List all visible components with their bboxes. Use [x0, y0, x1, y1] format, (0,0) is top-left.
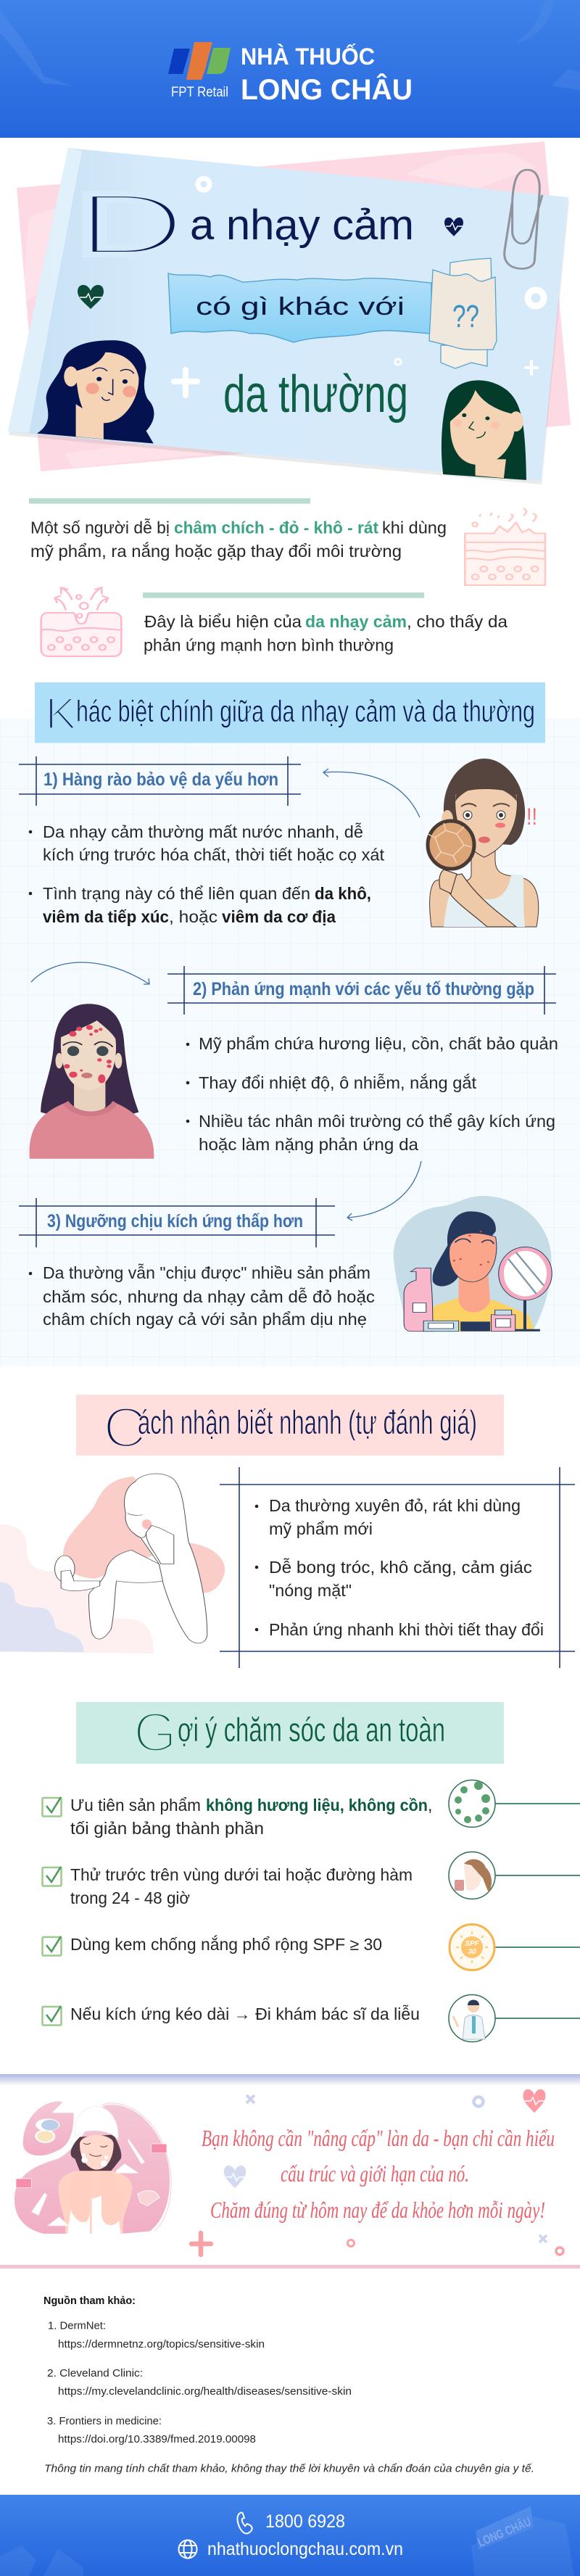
heading: quick self-check: C	[103, 1395, 146, 1459]
bullets 2: Nhiều tác nhân môi trường có thể gây kích ứng	[199, 1112, 555, 1131]
references: https://dermnetnz.org/topics/sensitive-skin	[58, 2338, 265, 2350]
face: girl with navy hair	[37, 340, 154, 444]
frame with bullets: mỹ phẩm mới	[269, 1519, 373, 1538]
title line 1: D	[75, 175, 187, 273]
logo: FPT Retail	[168, 42, 231, 100]
callout band	[0, 2074, 580, 2269]
intro text 1: khi dùng	[382, 518, 447, 537]
face: girl with green hair	[442, 380, 526, 480]
references: Thông tin mang tính chất tham khảo, không thay thế lời khuyên và chẩn đoán của chuyên gia y tế.	[44, 2463, 534, 2474]
question marks: ??	[452, 299, 479, 334]
arrow to heading 2	[31, 962, 149, 984]
heading: main differences: K	[45, 689, 77, 739]
footer band	[0, 2495, 580, 2576]
section: quick self-check	[0, 1395, 575, 1668]
bullets 2: Mỹ phẩm chứa hương liệu, cồn, chất bảo quản	[199, 1034, 558, 1053]
illustration: woman washing face	[14, 2101, 171, 2234]
intro text 2: Đây là biểu hiện của	[144, 612, 302, 631]
brand name: LONG CHÂU	[241, 73, 413, 106]
references: Nguồn tham khảo:	[44, 2295, 136, 2307]
hero note card	[8, 141, 571, 484]
bullets 1: kích ứng trước hóa chất, thời tiết hoặc cọ xát	[43, 846, 385, 864]
intro text 1: mỹ phẩm, ra nắng hoặc gặp thay đổi môi trường	[30, 542, 402, 561]
section 3	[19, 1161, 552, 1332]
references: 2. Cleveland Clinic:	[47, 2367, 143, 2379]
tip texts	[70, 1796, 432, 2023]
heading: safe care tips: ợi ý chăm sóc da an toàn	[178, 1711, 445, 1749]
icon: irritated skin layers	[465, 508, 545, 585]
bullets 3: chăm sóc, nhưng da nhạy cảm dễ đỏ hoặc	[43, 1287, 375, 1306]
footer band: LONG CHÂU	[476, 2515, 533, 2550]
icon: SPF 30 sun: SPF	[465, 1940, 480, 1948]
alert marks: !!	[526, 804, 537, 830]
intro text 2: da nhạy cảm	[305, 612, 407, 631]
illustration: woman with magnifying mirror	[428, 759, 539, 927]
section 2	[30, 962, 558, 1159]
heading frame 3: 3) Ngưỡng chịu kích ứng thấp hơn	[47, 1211, 303, 1231]
illustration: girl with acne	[30, 1004, 154, 1159]
intro text 2: , cho thấy da	[407, 612, 508, 631]
tip texts: ,	[428, 1796, 432, 1815]
decorative icons	[78, 178, 544, 395]
bullets 3	[29, 1263, 375, 1329]
logo: FPT Retail: FPT Retail	[171, 85, 228, 100]
tip texts: Thử trước trên vùng dưới tai hoặc đường hàm	[70, 1865, 413, 1884]
icon: skin with arrows	[41, 587, 121, 656]
heading: safe care tips: G	[133, 1702, 177, 1764]
icon: globe	[178, 2540, 197, 2559]
bullets 2	[186, 1034, 558, 1154]
intro text 1: châm chích - đỏ - khô - rát	[174, 518, 378, 537]
section 1	[19, 756, 539, 927]
callout message	[202, 2125, 555, 2223]
arrow to heading 1	[323, 769, 420, 817]
bullets 1: Tình trạng này có thể liên quan đến	[43, 884, 310, 903]
tip texts: Ưu tiên sản phẩm	[70, 1796, 201, 1815]
checklist icons	[42, 1797, 61, 2025]
paperclip	[505, 170, 542, 268]
intro text 2	[144, 612, 508, 654]
references	[44, 2295, 534, 2474]
tip texts: không hương liệu, không cồn	[206, 1796, 428, 1815]
bullets 1: Da nhạy cảm thường mất nước nhanh, dễ	[43, 822, 363, 841]
heading: safe care tips	[76, 1702, 504, 1764]
tip texts: tối giản bảng thành phần	[70, 1819, 264, 1838]
panel: grid background	[0, 718, 580, 1366]
frame with bullets	[220, 1467, 575, 1668]
title line 2: da thường	[223, 366, 408, 424]
bullets 1: da khô,	[315, 884, 371, 903]
icon: SPF 30 sun	[450, 1925, 494, 1970]
intro block 2	[41, 587, 508, 656]
bullets 1	[29, 822, 385, 926]
intro text 2: phản ứng mạnh hơn bình thường	[144, 635, 394, 654]
icon: woman with cream	[449, 1852, 495, 1899]
arrow to heading 3	[347, 1161, 421, 1221]
ribbon	[168, 273, 431, 342]
heading: quick self-check	[76, 1395, 504, 1459]
frame with bullets: "nóng mặt"	[269, 1581, 352, 1600]
references: 1. DermNet:	[48, 2319, 106, 2332]
tape	[429, 258, 497, 368]
illustration group in zoom coordinates	[37, 170, 542, 480]
website: nhathuoclongchau.com.vn	[207, 2539, 403, 2559]
tip texts: trong 24 - 48 giờ	[70, 1888, 190, 1907]
section: safe care tips	[42, 1702, 580, 2042]
decorative icons	[191, 2089, 563, 2255]
icon: SPF 30 sun: 30	[468, 1948, 476, 1956]
phone number: 1800 6928	[265, 2511, 345, 2532]
title line 1	[75, 175, 414, 273]
icon: natural cosmetics	[449, 1780, 495, 1828]
title line 1: a nhạy cảm	[190, 202, 414, 249]
illustration: woman touching cheek	[0, 1474, 225, 1654]
frame with bullets: Phản ứng nhanh khi thời tiết thay đổi	[269, 1620, 544, 1639]
ribbon text: có gì khác với	[196, 293, 405, 321]
bullets 2: hoặc làm nặng phản ứng da	[199, 1135, 418, 1154]
connector lines	[495, 1804, 580, 2018]
icon: doctor	[449, 1994, 495, 2042]
references: 3. Frontiers in medicine:	[47, 2415, 162, 2427]
background building	[0, 2506, 574, 2576]
header band	[0, 0, 580, 138]
heading frame 1: 1) Hàng rào bảo vệ da yếu hơn	[44, 769, 278, 790]
bullets 2: Thay đổi nhiệt độ, ô nhiễm, nắng gắt	[199, 1073, 477, 1092]
frame with bullets: Da thường xuyên đỏ, rát khi dùng	[269, 1496, 521, 1515]
heading frame 2: 2) Phản ứng mạnh với các yếu tố thường gặp	[193, 979, 534, 999]
illustration: woman, mirror and cosmetics	[394, 1196, 552, 1332]
bullets 1: viêm da cơ địa	[222, 907, 336, 926]
intro text 1: Một số người dễ bị	[30, 518, 170, 537]
brand name: NHÀ THUỐC	[241, 44, 375, 70]
tip texts: Nếu kích ứng kéo dài → Đi khám bác sĩ da liễu	[70, 2005, 420, 2023]
frame with bullets: Dễ bong tróc, khô căng, cảm giác	[269, 1558, 532, 1577]
tip texts: Dùng kem chống nắng phổ rộng SPF ≥ 30	[70, 1935, 382, 1954]
bullets 3: Da thường vẫn "chịu được" nhiều sản phẩm	[43, 1263, 370, 1282]
callout message: cấu trúc và giới hạn của nó.	[281, 2160, 469, 2187]
icon: phone	[237, 2512, 252, 2533]
intro text 1	[30, 518, 447, 561]
heading frame 1	[19, 756, 301, 806]
intro block 1	[29, 498, 545, 585]
brand name	[241, 44, 413, 106]
bullets 1: , hoặc	[169, 907, 218, 926]
references: https://my.clevelandclinic.org/health/diseases/sensitive-skin	[58, 2385, 352, 2398]
heading frame 2	[167, 966, 556, 1015]
bullets 1: viêm da tiếp xúc	[43, 907, 169, 926]
references: https://doi.org/10.3389/fmed.2019.00098	[58, 2433, 256, 2445]
heading frame 3	[19, 1198, 335, 1247]
bullets 3: châm chích ngay cả với sản phẩm dịu nhẹ	[43, 1310, 367, 1329]
heading: main differences	[35, 682, 545, 743]
